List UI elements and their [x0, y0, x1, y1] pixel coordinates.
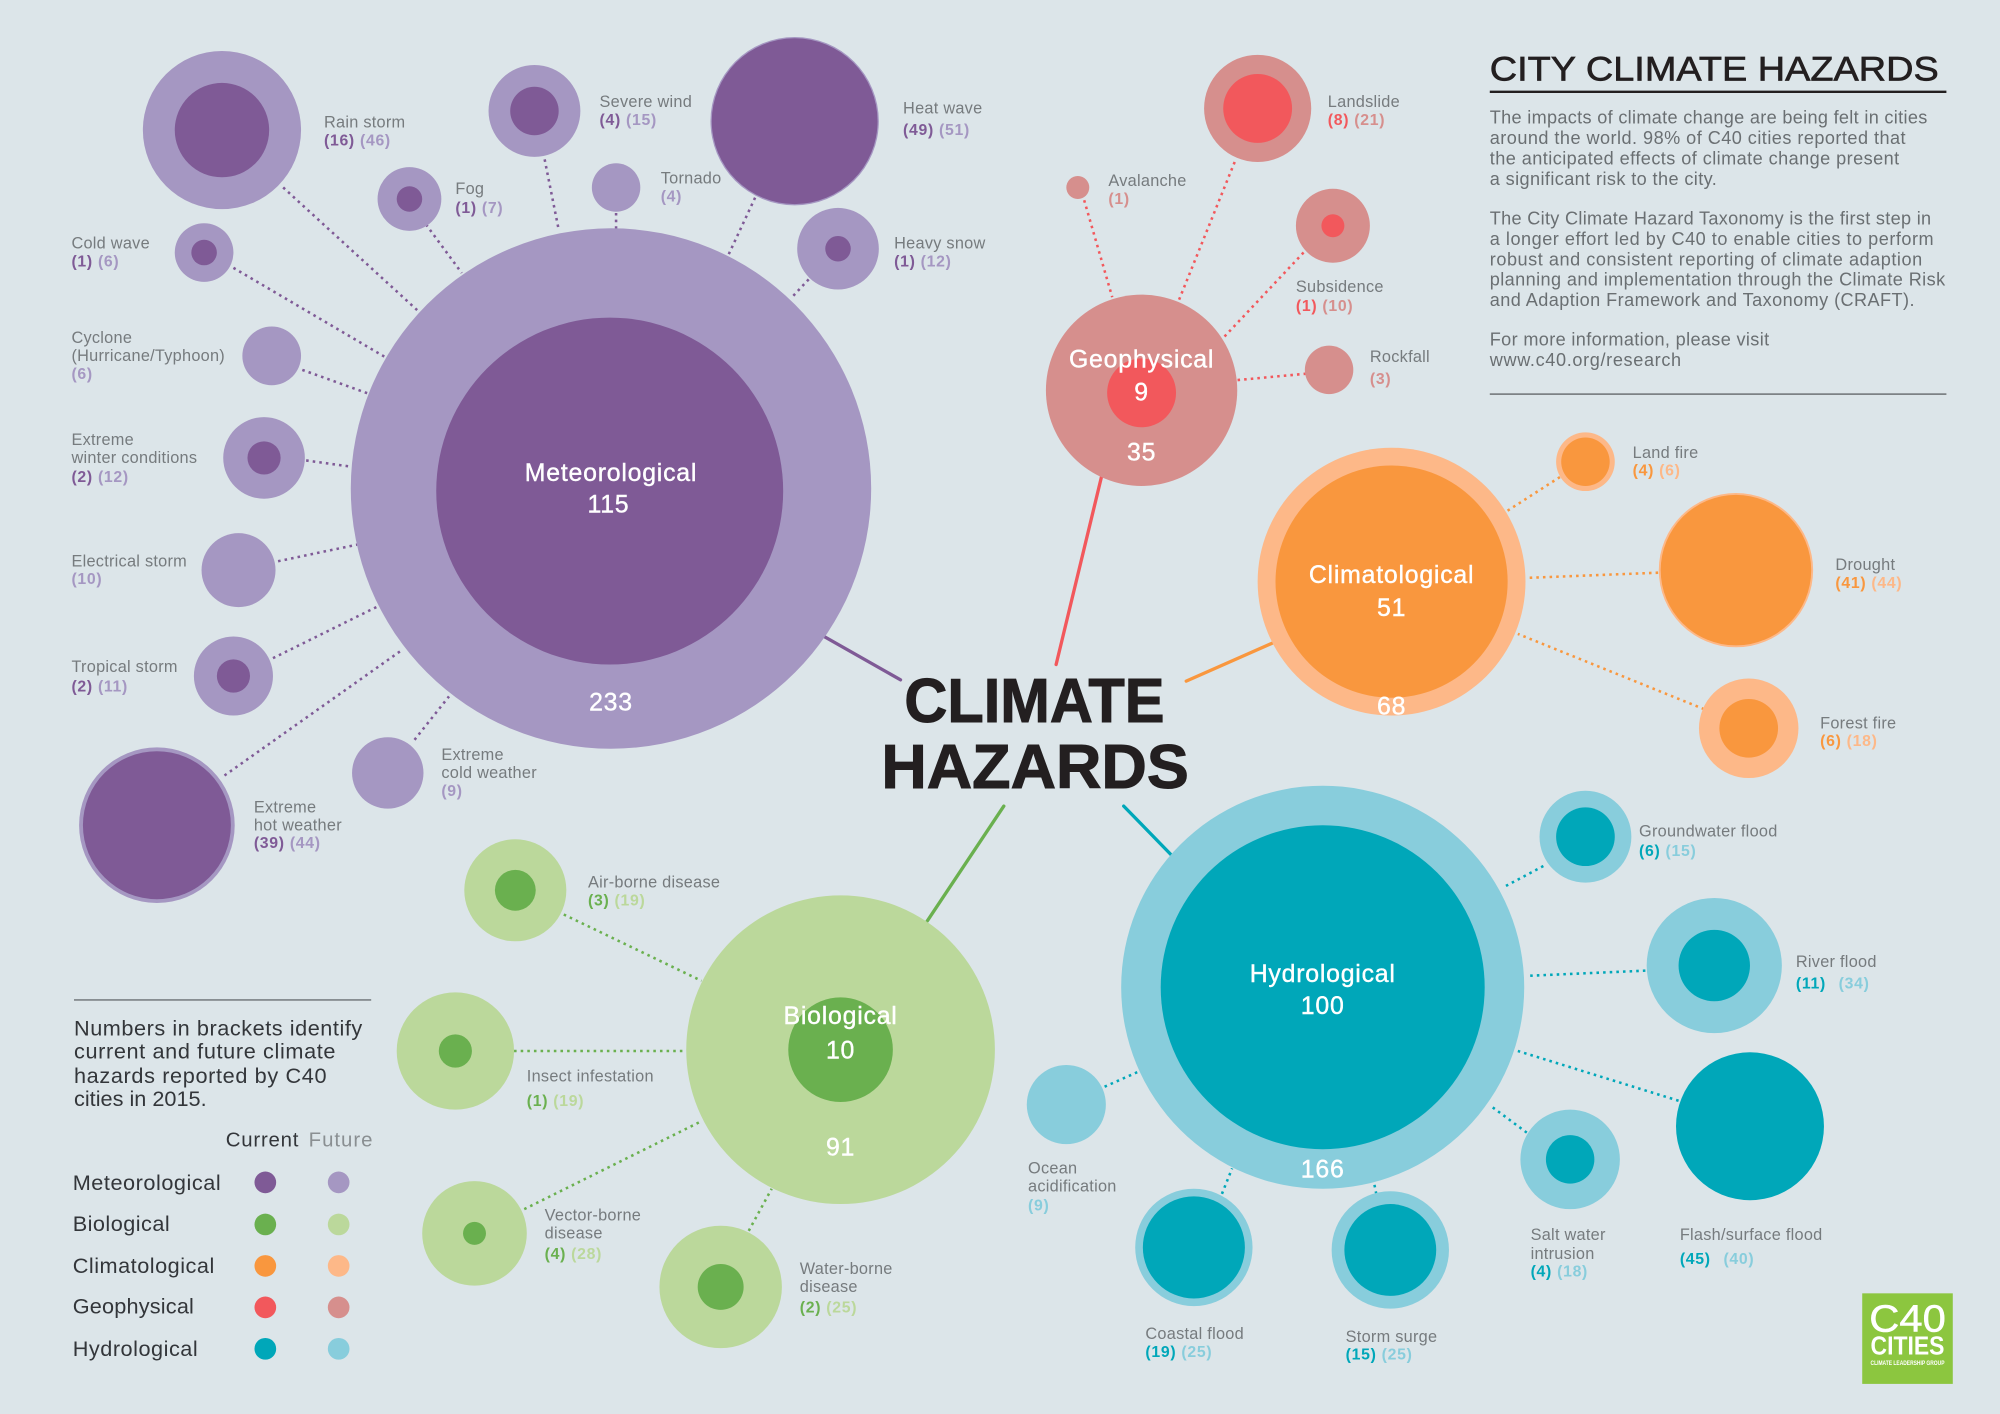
groundwater flood: Groundwater flood — [1639, 823, 1778, 841]
electrical storm — [71, 533, 276, 607]
legend: geophysical — [73, 1294, 350, 1319]
legend: climatological — [73, 1253, 350, 1278]
landslide — [1204, 55, 1400, 162]
rain storm: Rain storm — [324, 114, 405, 132]
cyclone: (Hurricane/Typhoon) — [71, 347, 225, 365]
climatological main bubble: 51 — [1377, 594, 1406, 622]
climatological main bubble: 68 — [1377, 692, 1406, 720]
extreme winter conditions: (2) (12) — [71, 469, 129, 486]
panel heading: CITY CLIMATE HAZARDS — [1490, 50, 1939, 88]
climatological main bubble — [1258, 448, 1525, 720]
geophysical dotted connectors — [1084, 162, 1306, 380]
meteorological dotted connectors — [225, 159, 809, 775]
storm surge: (15) (25) — [1346, 1347, 1413, 1364]
extreme hot weather: (39) (44) — [254, 835, 321, 852]
centre title: HAZARDS — [881, 732, 1189, 802]
extreme cold weather — [352, 737, 537, 809]
centre title — [881, 666, 1189, 802]
geophysical main bubble — [1046, 295, 1237, 486]
flash/surface flood: (45) (40) — [1680, 1251, 1754, 1268]
legend: meteorological — [73, 1170, 350, 1195]
water-borne disease — [659, 1226, 893, 1348]
legend column headers — [226, 1130, 372, 1152]
salt water intrusion: (4) (18) — [1531, 1264, 1588, 1281]
hydrological main bubble: 166 — [1301, 1155, 1345, 1183]
extreme hot weather: hot weather — [254, 816, 342, 834]
storm surge — [1332, 1191, 1449, 1364]
subsidence: (1) (10) — [1296, 298, 1353, 315]
legend note: hazards reported by C40 — [74, 1063, 327, 1088]
severe wind: Severe wind — [599, 93, 692, 111]
tropical storm: (2) (11) — [71, 678, 128, 695]
groundwater flood — [1540, 791, 1778, 883]
air-borne disease — [464, 839, 720, 941]
ocean acidification: (9) — [1028, 1197, 1049, 1214]
landslide: Landslide — [1328, 93, 1400, 111]
meteorological main bubble: Meteorological — [525, 459, 697, 487]
river flood: (11) (34) — [1796, 975, 1870, 992]
C40 logo: CITIES — [1871, 1333, 1944, 1361]
intro text: a longer effort led by C40 to enable cities to perform — [1490, 229, 1934, 249]
intro text: For more information, please visit — [1490, 330, 1769, 350]
rockfall: Rockfall — [1370, 348, 1430, 366]
heat wave — [710, 37, 982, 205]
legend — [73, 1000, 372, 1361]
heavy snow: (1) (12) — [894, 254, 952, 271]
ocean acidification: Ocean — [1028, 1159, 1077, 1177]
hydrological dotted connectors — [1105, 866, 1679, 1194]
climatological main bubble: Climatological — [1309, 561, 1474, 589]
storm surge: Storm surge — [1346, 1328, 1437, 1346]
hydrological group — [1027, 786, 1877, 1364]
coastal flood: Coastal flood — [1145, 1325, 1244, 1343]
groundwater flood: (6) (15) — [1639, 843, 1696, 860]
insect infestation — [397, 992, 654, 1110]
intro text — [1489, 108, 1946, 370]
tornado — [592, 163, 721, 212]
legend column headers: Current — [226, 1130, 299, 1152]
tornado: Tornado — [661, 170, 721, 188]
electrical storm: (10) — [71, 571, 102, 588]
fog: Fog — [455, 180, 484, 198]
extreme winter conditions — [70, 417, 305, 499]
rockfall — [1305, 346, 1430, 394]
drought: (41) (44) — [1835, 575, 1902, 592]
flash/surface flood: Flash/surface flood — [1680, 1226, 1823, 1244]
tornado: (4) — [661, 189, 682, 206]
coastal flood: (19) (25) — [1145, 1344, 1212, 1361]
rockfall: (3) — [1370, 371, 1391, 388]
legend note: Numbers in brackets identify — [74, 1016, 362, 1041]
connector lines from centre title — [824, 474, 1273, 921]
insect infestation: (1) (19) — [527, 1093, 584, 1110]
tropical storm: Tropical storm — [71, 658, 178, 676]
extreme cold weather: cold weather — [441, 764, 537, 782]
landslide: (8) (21) — [1328, 112, 1385, 129]
legend note: cities in 2015. — [74, 1086, 207, 1111]
intro text: The impacts of climate change are being felt in cities — [1490, 108, 1927, 128]
legend note — [74, 1016, 362, 1111]
insect infestation: Insect infestation — [527, 1068, 654, 1086]
centre title: CLIMATE — [904, 666, 1165, 736]
heat wave: (49) (51) — [903, 122, 970, 139]
severe wind: (4) (15) — [599, 112, 657, 129]
extreme hot weather — [79, 747, 342, 903]
vector-borne disease: Vector-borne — [545, 1207, 641, 1225]
intro text: The City Climate Hazard Taxonomy is the first step in — [1490, 208, 1931, 228]
meteorological main bubble: 233 — [589, 688, 633, 716]
legend column headers: Future — [309, 1130, 372, 1152]
biological main bubble — [686, 895, 995, 1204]
rain storm — [143, 51, 405, 209]
biological group — [397, 839, 995, 1348]
fog — [378, 167, 503, 231]
rain storm: (16) (46) — [324, 132, 391, 149]
biological main bubble: Biological — [784, 1002, 898, 1030]
intro text: the anticipated effects of climate change present — [1490, 149, 1899, 169]
legend note: current and future climate — [74, 1039, 335, 1064]
biological main bubble: 91 — [826, 1134, 855, 1162]
cyclone — [71, 327, 301, 385]
intro text: robust and consistent reporting of climate adaption — [1490, 249, 1922, 269]
extreme cold weather: Extreme — [441, 746, 504, 764]
air-borne disease: Air-borne disease — [588, 874, 720, 892]
legend: climatological: Climatological — [73, 1253, 214, 1278]
forest fire — [1699, 679, 1896, 778]
water-borne disease: Water-borne — [800, 1260, 893, 1278]
hydrological main bubble: Hydrological — [1250, 960, 1396, 988]
land fire: Land fire — [1633, 444, 1698, 462]
drought: Drought — [1835, 556, 1895, 574]
legend: hydrological — [73, 1336, 350, 1361]
cold wave: Cold wave — [71, 235, 150, 253]
drought — [1659, 493, 1902, 647]
river flood: River flood — [1796, 953, 1877, 971]
salt water intrusion — [1520, 1110, 1620, 1281]
geophysical main bubble: 35 — [1127, 438, 1156, 466]
meteorological group — [70, 37, 986, 903]
avalanche: (1) — [1108, 191, 1130, 208]
ocean acidification: acidification — [1028, 1177, 1117, 1195]
meteorological main bubble: 115 — [587, 491, 629, 519]
vector-borne disease: (4) (28) — [545, 1246, 602, 1263]
air-borne disease: (3) (19) — [588, 893, 645, 910]
land fire — [1556, 432, 1698, 491]
water-borne disease: disease — [800, 1278, 858, 1296]
legend: biological — [73, 1211, 350, 1236]
hydrological main bubble: 100 — [1301, 992, 1345, 1020]
climatological dotted connectors — [1506, 477, 1704, 709]
extreme cold weather: (9) — [441, 783, 463, 800]
salt water intrusion: intrusion — [1531, 1245, 1595, 1263]
forest fire: Forest fire — [1820, 714, 1896, 732]
climatological group — [1258, 432, 1902, 778]
legend: hydrological: Hydrological — [73, 1336, 198, 1361]
vector-borne disease: disease — [545, 1224, 603, 1242]
intro text: planning and implementation through the Climate Risk — [1490, 270, 1946, 290]
forest fire: (6) (18) — [1820, 733, 1878, 750]
legend: geophysical: Geophysical — [73, 1294, 194, 1319]
intro text: and Adaption Framework and Taxonomy (CRAFT). — [1490, 290, 1915, 310]
C40 logo: CLIMATE LEADERSHIP GROUP — [1871, 1360, 1945, 1367]
severe wind — [489, 65, 692, 157]
intro text: around the world. 98% of C40 cities reported that — [1490, 128, 1906, 148]
river flood — [1647, 898, 1877, 1033]
geophysical group — [1046, 55, 1430, 486]
cyclone: Cyclone — [71, 329, 132, 347]
biological main bubble: 10 — [826, 1037, 855, 1065]
avalanche — [1066, 172, 1187, 208]
flash/surface flood — [1676, 1052, 1824, 1268]
heavy snow — [797, 208, 986, 290]
extreme winter conditions: Extreme — [71, 431, 134, 449]
salt water intrusion: Salt water — [1531, 1226, 1606, 1244]
subsidence: Subsidence — [1296, 278, 1384, 296]
hydrological main bubble — [1121, 786, 1524, 1189]
heat wave: Heat wave — [903, 100, 982, 118]
extreme hot weather: Extreme — [254, 798, 316, 816]
electrical storm: Electrical storm — [71, 552, 187, 570]
legend: biological: Biological — [73, 1211, 170, 1236]
fog: (1) (7) — [455, 200, 503, 217]
land fire: (4) (6) — [1633, 463, 1681, 480]
vector-borne disease — [422, 1181, 641, 1286]
cold wave — [71, 223, 233, 282]
intro text: a significant risk to the city. — [1490, 169, 1717, 189]
geophysical main bubble: Geophysical — [1069, 345, 1214, 373]
avalanche: Avalanche — [1108, 172, 1187, 190]
geophysical main bubble: 9 — [1134, 379, 1149, 407]
C40 logo — [1862, 1293, 1953, 1384]
coastal flood — [1135, 1189, 1253, 1361]
water-borne disease: (2) (25) — [800, 1299, 857, 1316]
intro text: www.c40.org/research — [1489, 350, 1681, 370]
C40 logo: C40 — [1869, 1298, 1946, 1341]
legend: meteorological: Meteorological — [73, 1170, 221, 1195]
cold wave: (1) (6) — [71, 254, 119, 271]
biological dotted connectors — [514, 915, 772, 1231]
extreme winter conditions: winter conditions — [70, 449, 197, 467]
ocean acidification — [1027, 1065, 1117, 1214]
cyclone: (6) — [71, 366, 93, 383]
tropical storm — [71, 636, 273, 716]
intro panel — [1489, 50, 1946, 394]
subsidence — [1296, 189, 1384, 315]
meteorological main bubble — [351, 228, 871, 749]
heavy snow: Heavy snow — [894, 235, 986, 253]
